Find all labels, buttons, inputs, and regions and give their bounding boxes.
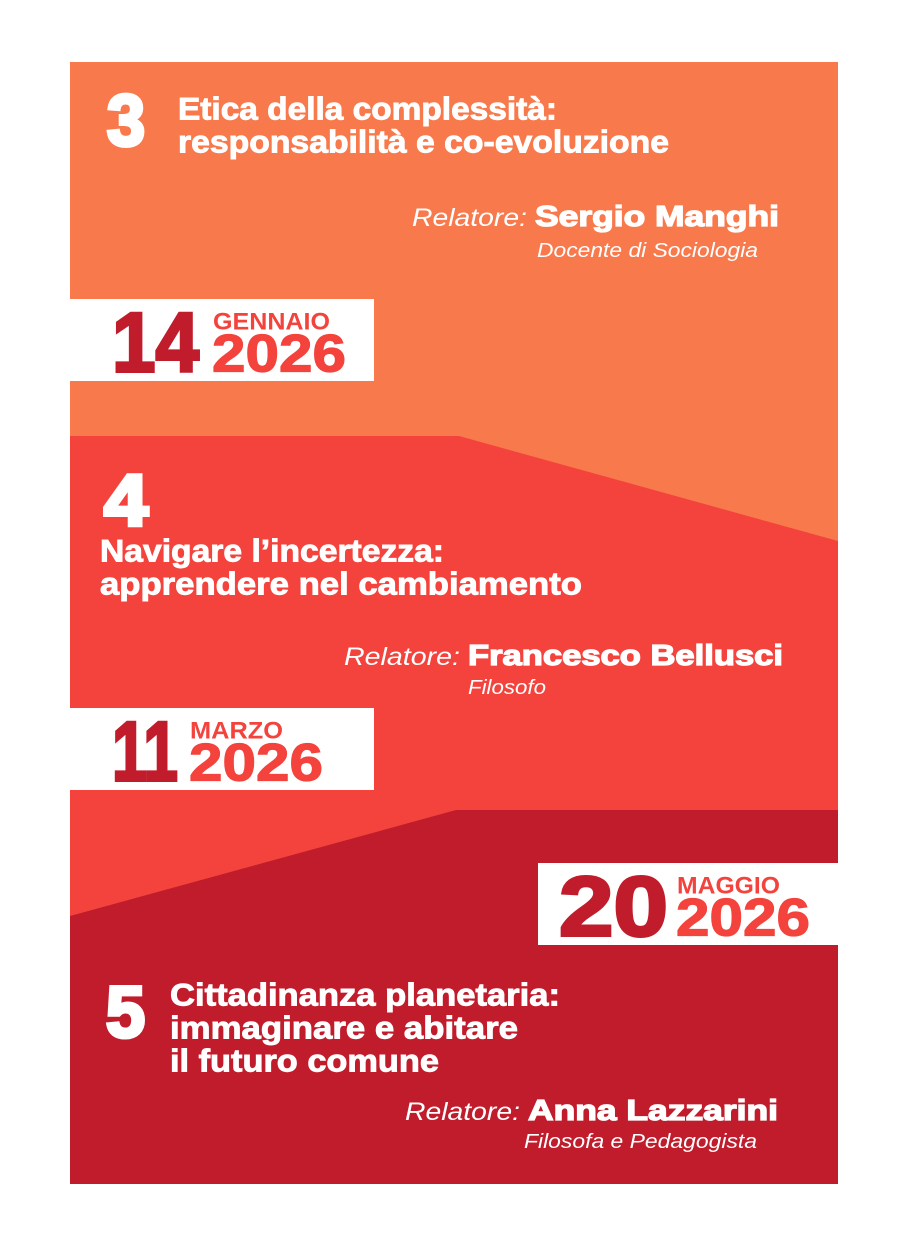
date badge: 14 gennaio 2026: [70, 296, 374, 390]
date badge: 11 marzo 2026: 11: [112, 704, 178, 798]
speaker: Anna Lazzarini: [405, 1095, 778, 1153]
date badge: 11 marzo 2026: 2026: [189, 734, 323, 792]
date badge: 20 maggio 2026: [538, 860, 838, 954]
speaker: Sergio Manghi: Docente di Sociologia: [537, 240, 758, 262]
heading: session 5 title: [170, 976, 560, 1078]
date badge: 14 gennaio 2026: 14: [112, 296, 199, 390]
heading: session 5 title: il futuro comune: [170, 1042, 439, 1078]
panel: session 4 background: [70, 436, 838, 917]
speaker: Anna Lazzarini: Filosofa e Pedagogista: [524, 1131, 757, 1153]
date badge: 20 maggio 2026: 2026: [676, 888, 810, 948]
session 3 content: [70, 81, 779, 390]
speaker: Anna Lazzarini: Relatore:: [405, 1098, 520, 1126]
panel: session 3 background: [70, 62, 838, 542]
speaker: Sergio Manghi: Sergio Manghi: [535, 201, 779, 233]
panel: session 5 background: [70, 810, 838, 1184]
heading: session 3 title: [178, 90, 669, 160]
date badge: 11 marzo 2026: MARZO: [190, 718, 283, 744]
number 5: 5: [106, 973, 145, 1053]
heading: session 5 title: Cittadinanza planetaria:: [170, 976, 560, 1012]
heading: session 4 title: Navigare l’incertezza:: [100, 532, 444, 568]
speaker: Francesco Bellusci: Filosofo: [468, 677, 546, 699]
heading: session 3 title: responsabilità e co-evoluzione: [178, 124, 669, 160]
heading: session 3 title: Etica della complessità:: [178, 90, 557, 126]
date badge: 20 maggio 2026: MAGGIO: [677, 872, 780, 900]
speaker: Sergio Manghi: Relatore:: [412, 204, 527, 232]
speaker: Francesco Bellusci: Relatore:: [344, 643, 460, 671]
speaker: Francesco Bellusci: [344, 640, 783, 699]
speaker: Francesco Bellusci: Francesco Bellusci: [468, 640, 783, 672]
session 5 content: [106, 860, 838, 1153]
session 4 content: [70, 461, 783, 798]
date badge: 14 gennaio 2026: 2026: [212, 324, 346, 384]
number 4: 4: [104, 461, 148, 541]
number 3: 3: [107, 81, 145, 161]
heading: session 4 title: apprendere nel cambiamento: [100, 566, 582, 602]
heading: session 4 title: [100, 532, 582, 602]
date badge: 11 marzo 2026: [70, 704, 374, 798]
date badge: 20 maggio 2026: 20: [559, 860, 668, 954]
date badge: 14 gennaio 2026: GENNAIO: [213, 308, 330, 336]
speaker: Sergio Manghi: [412, 201, 779, 262]
speaker: Anna Lazzarini: Anna Lazzarini: [528, 1095, 778, 1127]
heading: session 5 title: immaginare e abitare: [170, 1010, 518, 1046]
